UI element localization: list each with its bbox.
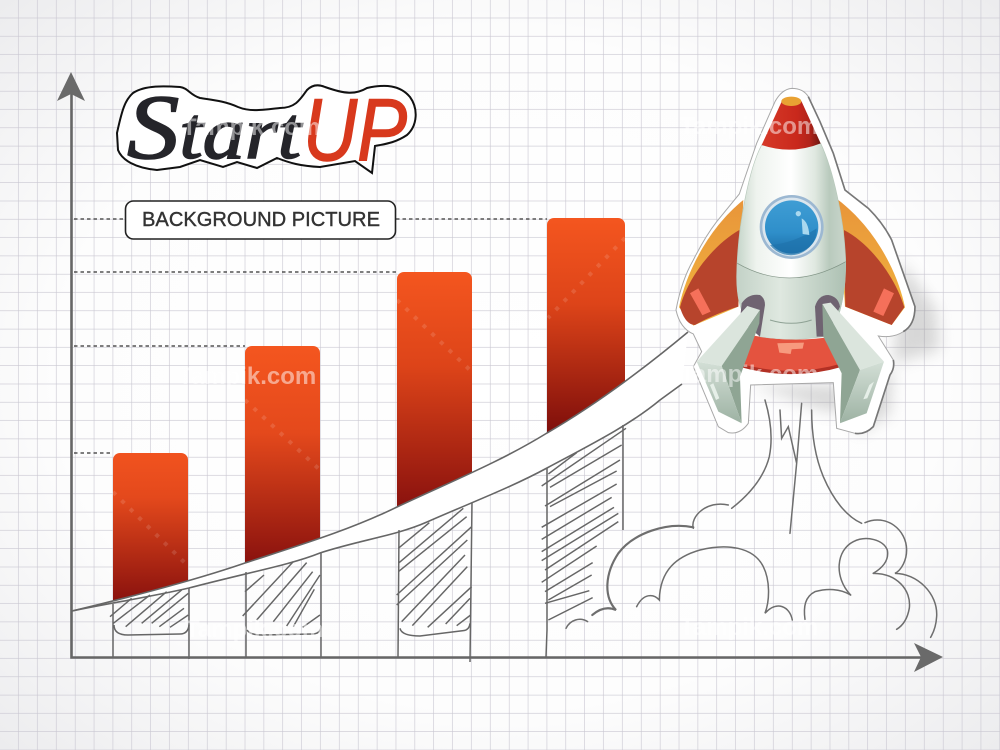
logo word: Start: Start: [127, 76, 304, 178]
rocket shadow: [750, 260, 940, 433]
growth curve band: [72, 332, 688, 611]
arrow: vertical axis: [57, 72, 85, 101]
left wing: [679, 200, 743, 326]
left landing leg: [697, 306, 760, 423]
hatched bar sketches: [110, 425, 626, 662]
logo: StartUP: [117, 76, 416, 179]
nose tip: [781, 97, 801, 106]
watermarks: Tampik.com: [680, 614, 818, 641]
nose cone: [762, 97, 821, 150]
bars: [113, 218, 625, 623]
arrow: horizontal axis: [914, 643, 943, 672]
watermarks: [178, 113, 818, 643]
red engine base: [739, 335, 843, 374]
watermarks: Tampik.com: [185, 616, 323, 643]
hatching bar 4: [542, 428, 626, 620]
purple leg joints: [740, 295, 765, 337]
axes with arrows: [57, 72, 943, 672]
watermarks: Tampik.com: [680, 113, 818, 140]
watermarks: Tampik.com: [182, 114, 320, 141]
watermarks: Tampik.com: [680, 361, 818, 388]
label: background picture: [126, 201, 396, 239]
porthole window: [760, 195, 824, 259]
logo word: UP: UP: [303, 80, 407, 179]
growth curve lines: [72, 332, 688, 611]
sticker dark right edge: [808, 97, 915, 434]
label: background picture: BACKGROUND PICTURE: [142, 209, 380, 231]
sticker outline: [676, 88, 915, 434]
rocket body: [737, 143, 846, 339]
watermarks: Tampik.com: [178, 363, 316, 390]
right wing: [838, 200, 905, 325]
hatching bars 1 and 2: [110, 562, 320, 627]
right landing leg: [822, 303, 884, 423]
hatching bar 3: [397, 508, 472, 636]
exhaust and smoke cloud sketch: [566, 400, 937, 637]
bar chart: [72, 218, 688, 662]
dashed level guide lines: [74, 219, 547, 453]
rocket: [676, 88, 940, 434]
lower body section: [737, 262, 846, 339]
logo sticker outline: [117, 85, 416, 173]
